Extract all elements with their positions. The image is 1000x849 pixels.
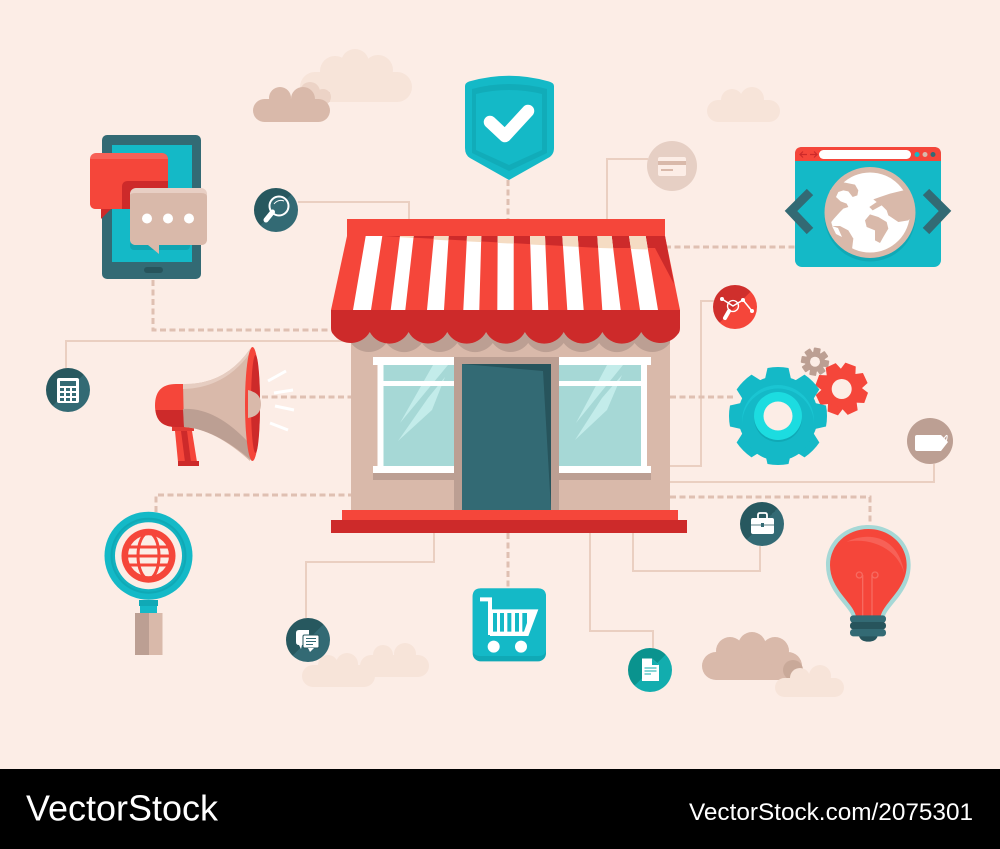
globe symbol <box>122 529 176 583</box>
cloud: tan top <box>253 87 330 122</box>
icon: document circle <box>628 648 672 692</box>
cloud: light top right <box>707 87 780 122</box>
icon: tablet with speech bubbles <box>90 135 207 279</box>
bulb glass <box>826 525 911 616</box>
connector lines: dashed <box>153 180 870 588</box>
handle <box>135 600 162 655</box>
cloud: light bottom left front <box>302 653 375 687</box>
icon: red gear <box>808 356 875 422</box>
footer url: VectorStock.com/2075301 <box>689 799 973 826</box>
tan speech bubble <box>130 188 207 254</box>
red speech bubble <box>90 153 168 219</box>
icon: light bulb <box>826 525 911 642</box>
icon: calculator circle <box>46 368 90 412</box>
icon: megaphone <box>155 347 294 466</box>
icon: price tag circle <box>907 418 953 464</box>
right window <box>559 357 651 480</box>
icon: chat circle <box>286 618 330 662</box>
cloud: tan bottom right <box>702 632 802 680</box>
icon: magnifying glass with globe <box>104 512 192 655</box>
cloud: light bottom right <box>775 665 844 697</box>
cloud: large light top <box>300 49 412 102</box>
icon: credit card circle <box>647 141 697 191</box>
bulb base <box>850 615 886 642</box>
cloud: light bottom left back <box>360 643 429 677</box>
cloud: shadow bottom right <box>783 660 803 680</box>
megaphone cone <box>183 349 250 461</box>
browser title bar <box>795 147 941 161</box>
icon: magnifier circle <box>254 188 298 232</box>
icon: browser window with globe <box>791 147 945 267</box>
icon: analytics circle <box>713 285 757 329</box>
footer brand: VectorStock <box>26 788 219 828</box>
door frame <box>454 357 559 510</box>
icon: large teal gear <box>729 367 827 465</box>
wall <box>351 333 670 511</box>
megaphone back <box>155 384 184 427</box>
lens ring <box>104 512 192 600</box>
icon: briefcase circle <box>740 502 784 546</box>
storefront <box>331 219 687 533</box>
icon: shield with check mark <box>465 76 554 180</box>
awning <box>331 219 680 344</box>
carousel arrows <box>791 192 945 231</box>
sound rays <box>268 371 294 430</box>
footer bar <box>0 769 1000 849</box>
globe <box>824 167 916 262</box>
filament <box>856 572 878 616</box>
cloud: shadow behind tan cloud <box>300 82 331 105</box>
left window <box>373 357 454 480</box>
step <box>331 510 687 533</box>
door <box>462 364 551 510</box>
icon: small grey gear <box>799 345 831 378</box>
megaphone handle <box>172 426 199 466</box>
icon: shopping cart <box>473 588 546 661</box>
valance shadow <box>351 330 670 352</box>
megaphone bell <box>245 347 260 461</box>
connector lines: solid <box>66 159 934 648</box>
